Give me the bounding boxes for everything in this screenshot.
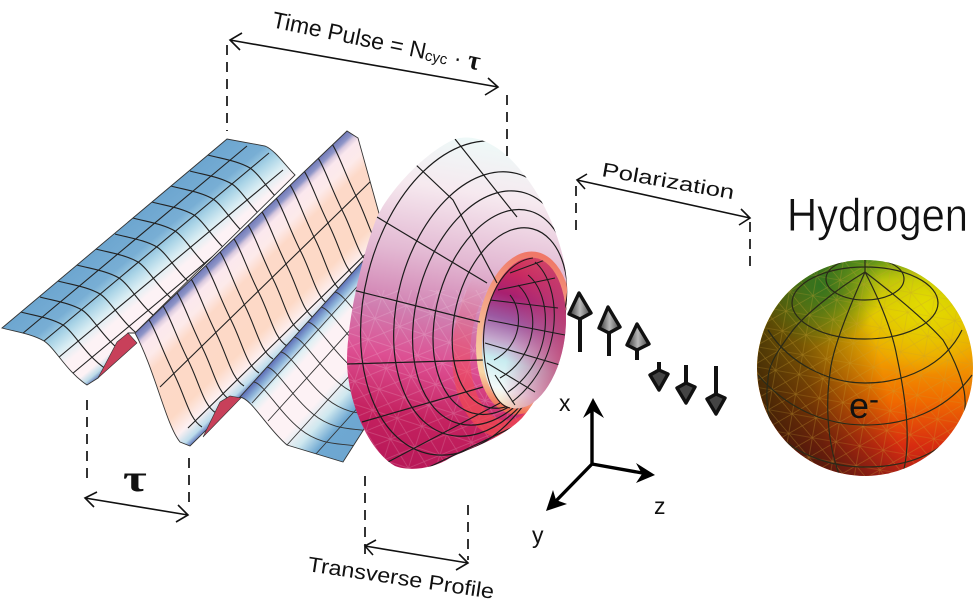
coordinate axes [532, 390, 666, 548]
time pulse label: cyc [423, 47, 449, 69]
time pulse dashed guides [87, 45, 750, 560]
arrow down 4 [650, 362, 668, 390]
electron label: e [849, 385, 869, 426]
tau double arrow [85, 492, 188, 522]
transverse profile label: Transverse Profile [306, 553, 496, 604]
hydrogen atom sphere [755, 258, 974, 480]
arrow up 2 [599, 307, 620, 356]
doughnut beam transverse profile [347, 138, 568, 469]
electron label: - [869, 383, 879, 416]
third wave crest (blue) [240, 261, 364, 462]
time pulse double arrow [230, 33, 498, 95]
axis label z: z [654, 493, 666, 519]
doughnut central hole [482, 258, 566, 408]
arrow down 5 [677, 365, 695, 403]
time pulse label: Time Pulse = N [270, 6, 429, 64]
arrow up 3 [627, 324, 649, 360]
tau label: τ [123, 457, 147, 499]
second wave crest (peach) [135, 131, 385, 446]
time pulse label: · [445, 43, 471, 73]
axis label y: y [532, 522, 544, 548]
axis label x: x [559, 390, 571, 416]
red trough patch right [203, 396, 241, 437]
time pulse label: τ [465, 44, 484, 76]
polarization double arrow [577, 174, 750, 225]
transverse profile double arrow [365, 540, 468, 570]
arrow down 6 [707, 366, 725, 414]
polarization arrows [569, 293, 725, 414]
wave pulse surface [1, 130, 380, 462]
polarization label: Polarization [600, 159, 736, 204]
arrow up 1 [569, 293, 591, 352]
first wave crest (blue) [2, 139, 297, 385]
red trough patch left [98, 333, 137, 378]
